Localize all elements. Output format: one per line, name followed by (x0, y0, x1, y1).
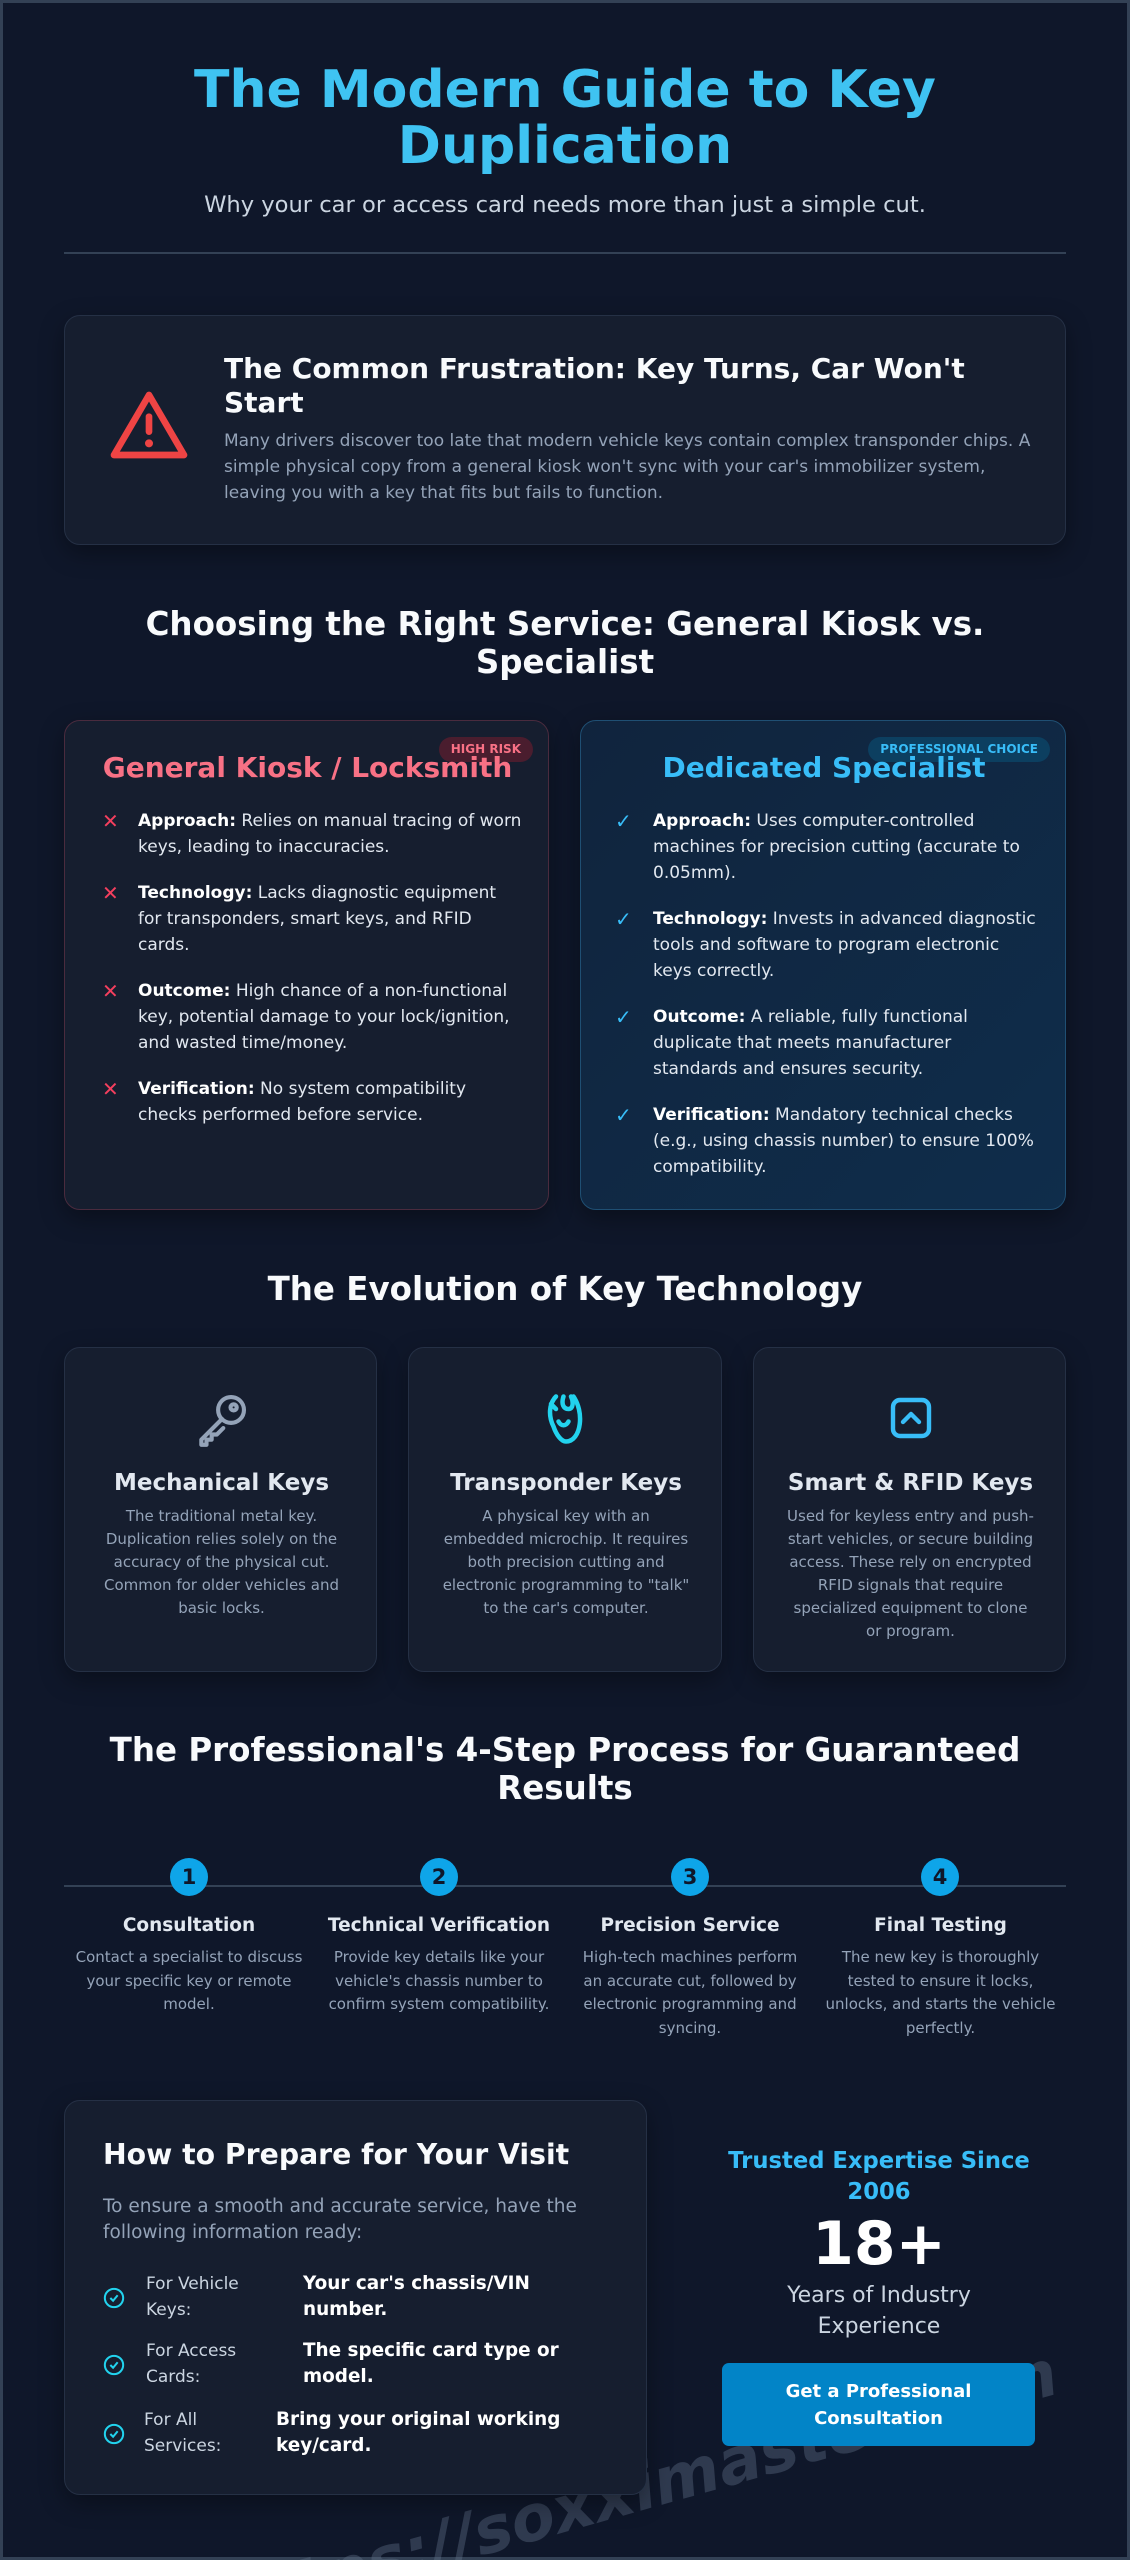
panel: how to prepare (64, 2100, 647, 2495)
item: vehicle keys: For Vehicle Keys: (146, 2274, 239, 2320)
step 4: Final Testing (874, 1915, 1007, 1936)
panel: common frustration (64, 315, 1066, 545)
list item: Verification: Mandatory technical checks (e.g., using chassis number) to ensure 100% compatibility. (653, 1105, 1034, 1177)
card title: Dedicated Specialist (662, 751, 986, 784)
list item: Technology: Invests in advanced diagnostic (653, 909, 1036, 929)
panel: dedicated specialist (580, 720, 1066, 1210)
icon: smart key (890, 1398, 932, 1438)
panel: smart & rfid keys (753, 1347, 1066, 1672)
title: Duplication (398, 116, 732, 176)
panel: dedicated specialist: ✓ (615, 907, 632, 931)
title: The Modern Guide to Key (194, 60, 936, 120)
description: A physical key with an embedded microchip. It requires both precision cutting and electronic programming to "talk" to the car's computer. (443, 1507, 689, 1617)
timeline (64, 1858, 1066, 2036)
badge: professional choice (868, 737, 1050, 762)
item: access cards: For Access Cards: (146, 2341, 236, 2387)
icon: warning triangle (110, 392, 188, 458)
subtitle: Why your car or access card needs more than just a simple cut. (204, 192, 926, 218)
item: all services: Bring your original working key/card. (276, 2409, 560, 2456)
panel: dedicated specialist: ✓ (615, 1103, 632, 1127)
title: Transponder Keys (450, 1470, 682, 1496)
stat: years of experience: Years of Industry (787, 2283, 971, 2308)
icon: key (199, 1395, 246, 1447)
list item: Outcome: High chance of a non-functional key, potential damage to your lock/ignition, and wasted time/money. (138, 981, 510, 1053)
stat: years of experience: Experience (818, 2314, 940, 2339)
step 2: Technical Verification (328, 1915, 550, 1936)
list item (615, 907, 1036, 981)
button: consultation: Get a Professional (786, 2381, 971, 2402)
step 3: High-tech machines perform an accurate cut, followed by electronic programming and syncing. (583, 1948, 797, 2036)
item: all services: For All Services: (144, 2410, 221, 2456)
list item: Technology: Lacks diagnostic equipment for transponders, smart keys, and RFID cards. (138, 883, 496, 955)
panel: general kiosk: ✕ (102, 809, 119, 833)
intro: To ensure a smooth and accurate service, have the following information ready: (103, 2196, 577, 2243)
step 3: Precision Service (600, 1915, 780, 1936)
stat: years of experience: 18+ (812, 2209, 946, 2279)
description: The traditional metal key. Duplication relies solely on the accuracy of the physical cut. Common for older vehicles and basic locks. (104, 1507, 339, 1617)
title: Mechanical Keys (114, 1470, 329, 1496)
heading: evolution: The Evolution of Key Technology (268, 1270, 862, 1308)
stat: years of experience (728, 2148, 1030, 2339)
step 2 (328, 1858, 550, 2013)
step 1: Consultation (123, 1915, 255, 1936)
body text: Many drivers discover too late that modern vehicle keys contain complex transponder chips. A simple physical copy from a general kiosk won't sync with your car's immobilizer system, leaving you with a key that fits but fails to function. (224, 431, 1030, 503)
item: vehicle keys: Your car's chassis/VIN number. (303, 2273, 530, 2320)
step 1: Contact a specialist to discuss your specific key or remote model. (76, 1948, 302, 2013)
heading: The Common Frustration: Key Turns, Car Won't Start (224, 352, 965, 419)
panel: general kiosk: ✕ (102, 1077, 119, 1101)
panel: transponder keys (408, 1347, 722, 1672)
badge: high risk (439, 737, 533, 762)
step 1: 1 (182, 1865, 196, 1889)
item: access cards: The specific card type or model. (303, 2340, 559, 2387)
panel: general kiosk (64, 720, 549, 1210)
heading: choosing the right service: Choosing the Right Service: General Kiosk vs. Specialist (146, 605, 984, 681)
panel: dedicated specialist: ✓ (615, 1005, 632, 1029)
step 3: 3 (683, 1865, 697, 1889)
stat: years of experience: Trusted Expertise Since (728, 2148, 1030, 2174)
list item: Outcome: A reliable, fully functional duplicate that meets manufacturer standards and ensures security. (653, 1007, 968, 1079)
button: consultation (722, 2363, 1035, 2446)
step 2: Provide key details like your vehicle's chassis number to confirm system compatibility. (329, 1948, 549, 2013)
list item: Verification: No system compatibility checks performed before service. (138, 1079, 466, 1125)
list item: Approach: Uses computer-controlled machines for precision cutting (accurate to 0.05mm). (653, 811, 1020, 883)
description: Used for keyless entry and push-start vehicles, or secure building access. These rely on encrypted RFID signals that require specialized equipment to clone or program. (787, 1507, 1034, 1640)
badge: professional choice: PROFESSIONAL CHOICE (880, 742, 1038, 756)
step 4 (826, 1858, 1055, 2036)
step 2: 2 (432, 1865, 446, 1889)
step 4: 4 (933, 1865, 947, 1889)
step 4: The new key is thoroughly tested to ensure it locks, unlocks, and starts the vehicle perfectly. (826, 1948, 1055, 2036)
panel: general kiosk: ✕ (102, 881, 119, 905)
item: vehicle keys (104, 2273, 530, 2320)
item: all services (104, 2409, 560, 2456)
list item: keys correctly. (653, 961, 774, 981)
panel: dedicated specialist: ✓ (615, 809, 632, 833)
panel: mechanical keys (64, 1347, 377, 1672)
heading: How to Prepare for Your Visit (103, 2138, 569, 2171)
step 3 (583, 1858, 797, 2036)
panel: general kiosk: ✕ (102, 979, 119, 1003)
item: access cards (104, 2340, 559, 2387)
list item: Approach: Relies on manual tracing of worn keys, leading to inaccuracies. (138, 811, 521, 857)
stat: years of experience: 2006 (847, 2179, 911, 2205)
icon: transponder (548, 1394, 582, 1444)
step 1 (76, 1858, 302, 2013)
list item: tools and software to program electronic (653, 935, 999, 955)
title (194, 60, 936, 176)
button: consultation: Consultation (814, 2408, 943, 2429)
badge: high risk: HIGH RISK (451, 742, 521, 756)
card title: General Kiosk / Locksmith (103, 751, 512, 784)
heading: 4-step process: The Professional's 4-Step Process for Guaranteed Results (110, 1731, 1020, 1807)
title: Smart & RFID Keys (788, 1470, 1033, 1496)
